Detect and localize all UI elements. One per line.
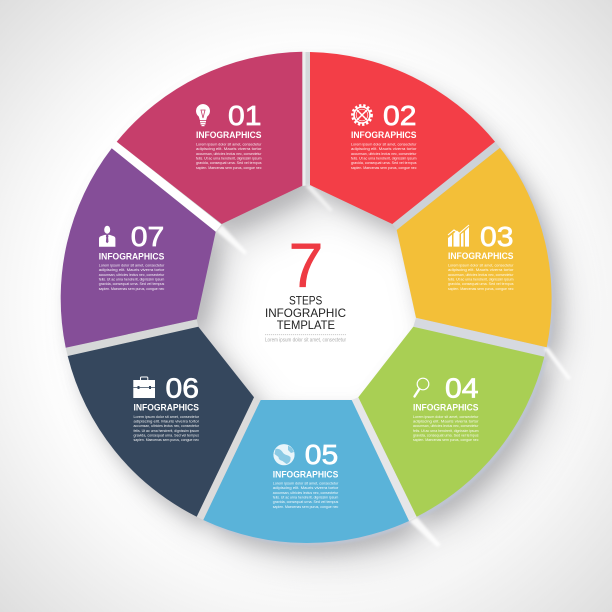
step number and text 01: felis. Ut ac urna hendrerit, dignissim ipsum [196, 156, 262, 160]
step 01 panel [117, 52, 302, 224]
step number and text 06: sapien. Maecenas sem purus, congue nec [134, 438, 199, 442]
step number and text 02: felis. Ut ac urna hendrerit, dignissim ipsum [351, 156, 416, 160]
subtitle: Lorem ipsum dolor sit amet, consectetur [265, 338, 346, 344]
step number and text 05: Lorem ipsum dolor sit amet, consectetur [273, 482, 339, 486]
step number and text 03: felis. Ut ac urna hendrerit, dignissim ipsum [448, 278, 514, 282]
step number and text 06: gravida, consequat urna. Sed vel tempus [134, 433, 199, 437]
step number and text 04: Lorem ipsum dolor sit amet, consectetur [413, 415, 479, 419]
wide soft shadow of the ring [81, 76, 572, 567]
light streaks extending from the gaps [216, 185, 571, 547]
step number and text 03: adipiscing elit. Mauris viverra tortor [448, 268, 514, 272]
step number and text 05: 05 [305, 439, 338, 470]
gaps between segments [66, 52, 547, 521]
step number and text 05: accumsan, ultricies lectus nec, consectetur [273, 491, 339, 495]
step number and text 05: INFOGRAPHICS [273, 470, 339, 481]
step number and text 02: sapien. Maecenas sem purus, congue nec [351, 166, 417, 170]
step number and text 01: Lorem ipsum dolor sit amet, consectetur [196, 142, 262, 146]
step number and text 03: Lorem ipsum dolor sit amet, consectetur [448, 264, 514, 268]
step number and text 04: sapien. Maecenas sem purus, congue nec [413, 438, 479, 442]
icon: magnifying glass [414, 378, 429, 396]
step number and text 06 [134, 372, 200, 442]
step number and text 07 [99, 221, 165, 291]
step number and text 04: accumsan, ultricies lectus nec, consectetur [413, 424, 479, 428]
step number and text 01: accumsan, ultricies lectus nec, consectetur [196, 152, 262, 156]
step number and text 07: Lorem ipsum dolor sit amet, consectetur [99, 264, 165, 268]
step number and text 05: gravida, consequat urna. Sed vel tempus [273, 500, 338, 504]
step number and text 05: felis. Ut ac urna hendrerit, dignissim ipsum [273, 496, 338, 500]
title: steps infographic template: TEMPLATE [277, 319, 335, 332]
centre title block [265, 232, 346, 344]
step number and text 01: sapien. Maecenas sem purus, congue nec [196, 166, 262, 170]
icon: briefcase [133, 377, 155, 398]
step number and text 07: gravida, consequat urna. Sed vel tempus [99, 282, 164, 286]
step number and text 01: gravida, consequat urna. Sed vel tempus [196, 161, 262, 165]
step number and text 03: INFOGRAPHICS [448, 251, 514, 262]
title: steps infographic template [265, 294, 346, 332]
step 05 panel [203, 400, 409, 543]
step number and text 07: accumsan, ultricies lectus nec, consectetur [99, 273, 165, 277]
large red seven: 7 [289, 232, 323, 301]
step number and text 02: accumsan, ultricies lectus nec, consectetur [351, 152, 417, 156]
step number and text 04: felis. Ut ac urna hendrerit, dignissim ipsum [413, 429, 478, 433]
step number and text 03: 03 [480, 221, 514, 252]
soft drop shadow of the ring [70, 63, 561, 554]
step number and text 07: 07 [131, 221, 164, 252]
step 02 panel [310, 52, 495, 224]
title: steps infographic template: INFOGRAPHIC [265, 307, 346, 320]
step number and text 02: 02 [383, 100, 416, 131]
step number and text 07: felis. Ut ac urna hendrerit, dignissim ipsum [99, 278, 164, 282]
step number and text 06: 06 [166, 372, 199, 403]
step number and text 06: felis. Ut ac urna hendrerit, dignissim ipsum [134, 429, 199, 433]
step number and text 03: sapien. Maecenas sem purus, congue nec [448, 287, 514, 291]
step number and text 01 [196, 100, 262, 170]
icon: light bulb [196, 104, 210, 126]
step number and text 01: adipiscing elit. Mauris viverra tortor [196, 147, 262, 151]
step number and text 04: 04 [445, 372, 478, 403]
icon: globe [273, 444, 295, 465]
tight edge shadow of the ring [206, 150, 554, 546]
step number and text 04: INFOGRAPHICS [413, 402, 479, 413]
step 04 panel [358, 327, 544, 517]
step number and text 04 [413, 372, 479, 442]
step number and text 02: gravida, consequat urna. Sed vel tempus [351, 161, 417, 165]
step number and text 05 [273, 439, 339, 509]
step number and text 01: INFOGRAPHICS [196, 130, 262, 141]
step number and text 03 [448, 221, 514, 291]
step number and text 07: sapien. Maecenas sem purus, congue nec [99, 287, 164, 291]
step number and text 02 [351, 100, 417, 170]
step number and text 06: adipiscing elit. Mauris viverra tortor [134, 419, 200, 423]
step number and text 06: accumsan, ultricies lectus nec, consectetur [134, 424, 200, 428]
step 03 panel [397, 148, 552, 347]
step number and text 02: INFOGRAPHICS [351, 130, 417, 141]
step number and text 03: gravida, consequat urna. Sed vel tempus [448, 282, 514, 286]
step number and text 07: adipiscing elit. Mauris viverra tortor [99, 268, 165, 272]
step number and text 05: sapien. Maecenas sem purus, congue nec [273, 505, 338, 509]
step number and text 05: adipiscing elit. Mauris viverra tortor [273, 486, 339, 490]
step 07 panel [61, 148, 216, 348]
step 06 panel [68, 327, 254, 517]
icon: gear [352, 105, 372, 125]
step number and text 07: INFOGRAPHICS [99, 251, 165, 262]
step number and text 01: 01 [228, 100, 262, 131]
step number and text 02: adipiscing elit. Mauris viverra tortor [351, 147, 417, 151]
step number and text 06: Lorem ipsum dolor sit amet, consectetur [134, 415, 200, 419]
step number and text 03: accumsan, ultricies lectus nec, consectetur [448, 273, 514, 277]
title: steps infographic template: STEPS [289, 294, 323, 307]
step number and text 04: gravida, consequat urna. Sed vel tempus [413, 433, 479, 437]
step number and text 06: INFOGRAPHICS [134, 402, 200, 413]
step number and text 02: Lorem ipsum dolor sit amet, consectetur [351, 142, 417, 146]
icon: business person [99, 226, 115, 247]
icon: bar chart [448, 225, 469, 247]
step number and text 04: adipiscing elit. Mauris viverra tortor [413, 419, 479, 423]
